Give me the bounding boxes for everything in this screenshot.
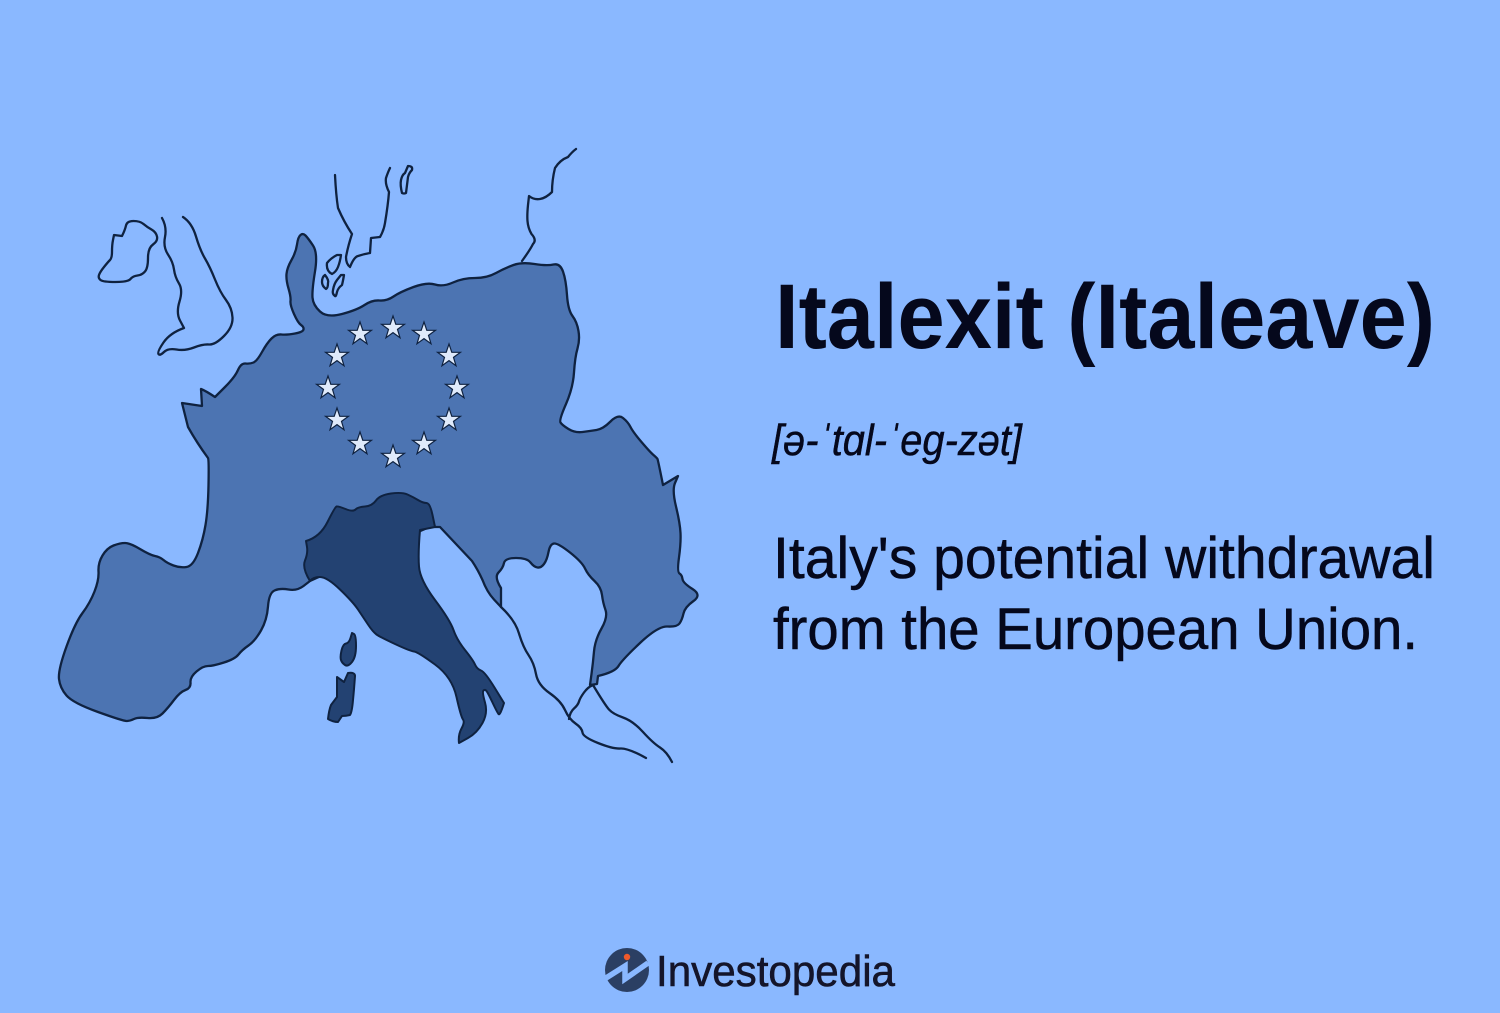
star	[438, 344, 460, 366]
Investopedia logo	[605, 947, 895, 996]
star	[382, 445, 404, 467]
Ireland	[99, 221, 157, 282]
definition text: Italy's potential withdrawal	[773, 526, 1435, 591]
star	[446, 376, 468, 398]
definition text	[773, 526, 1435, 662]
icon: logo mark	[605, 948, 649, 992]
star	[349, 322, 371, 344]
Baltic coast	[522, 149, 576, 261]
star	[349, 432, 371, 454]
star	[413, 322, 435, 344]
Gotland	[401, 166, 412, 194]
Danish islands	[322, 255, 344, 296]
Italy	[304, 493, 504, 743]
star	[317, 376, 339, 398]
definition text: from the European Union.	[773, 597, 1418, 662]
wordmark: Investopedia	[656, 947, 895, 996]
pronunciation: [ə-ˈtɑl-ˈeg-zət]	[771, 416, 1024, 465]
star	[326, 408, 348, 430]
Corsica	[341, 633, 356, 666]
Great Britain	[158, 217, 233, 355]
Sardinia	[328, 673, 355, 722]
star	[326, 344, 348, 366]
title: Italexit (Italeave)	[775, 266, 1435, 368]
star	[382, 316, 404, 338]
Balkan east coast	[569, 685, 672, 762]
star	[413, 432, 435, 454]
EU member territory	[59, 234, 698, 721]
EU star circle	[317, 316, 468, 467]
Balkan west coast	[501, 607, 646, 758]
map of Europe	[59, 149, 698, 762]
star	[438, 408, 460, 430]
Scandinavia coast	[335, 168, 390, 267]
